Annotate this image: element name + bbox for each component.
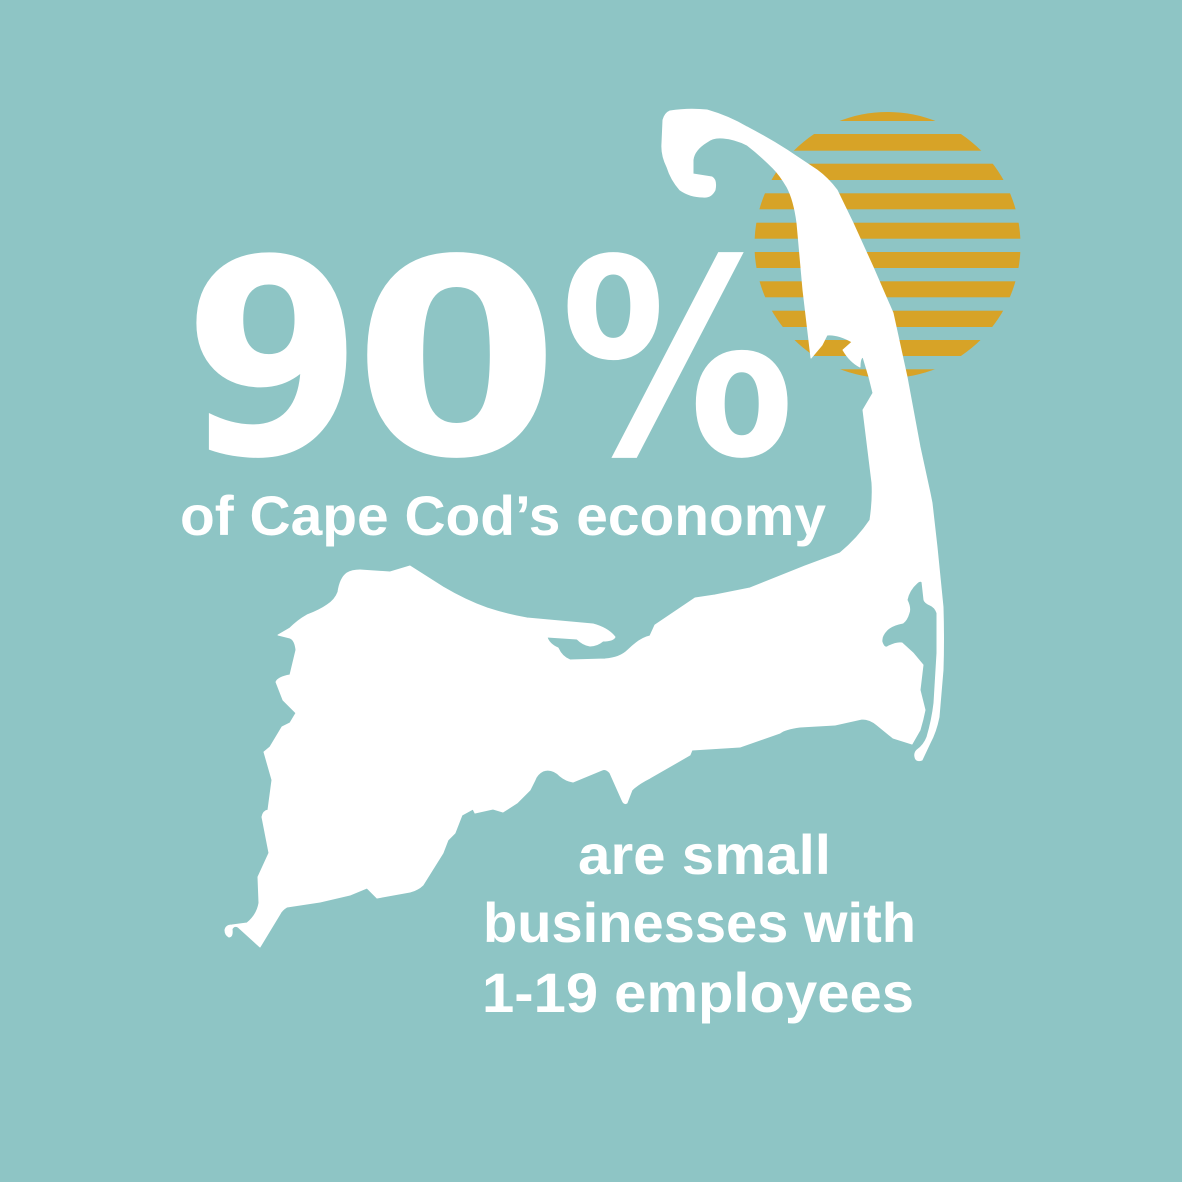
- infographic canvas: [182, 108, 1020, 1024]
- subheading: of Cape Cod's economy: of Cape Cod’s economy: [180, 484, 826, 547]
- line 1: are small: [578, 823, 831, 886]
- line 3: 1-19 employees: [482, 961, 914, 1024]
- icon: striped sun: [750, 110, 1026, 379]
- percent sign: %: [560, 203, 795, 519]
- text block: are small businesses with 1-19 employees: [482, 823, 916, 1024]
- digit 9: 9: [183, 203, 363, 519]
- map: Cape Cod silhouette: [225, 109, 944, 947]
- line 2: businesses with: [483, 891, 916, 954]
- digit 0: 0: [353, 203, 560, 519]
- statistic: 90%: [183, 203, 795, 519]
